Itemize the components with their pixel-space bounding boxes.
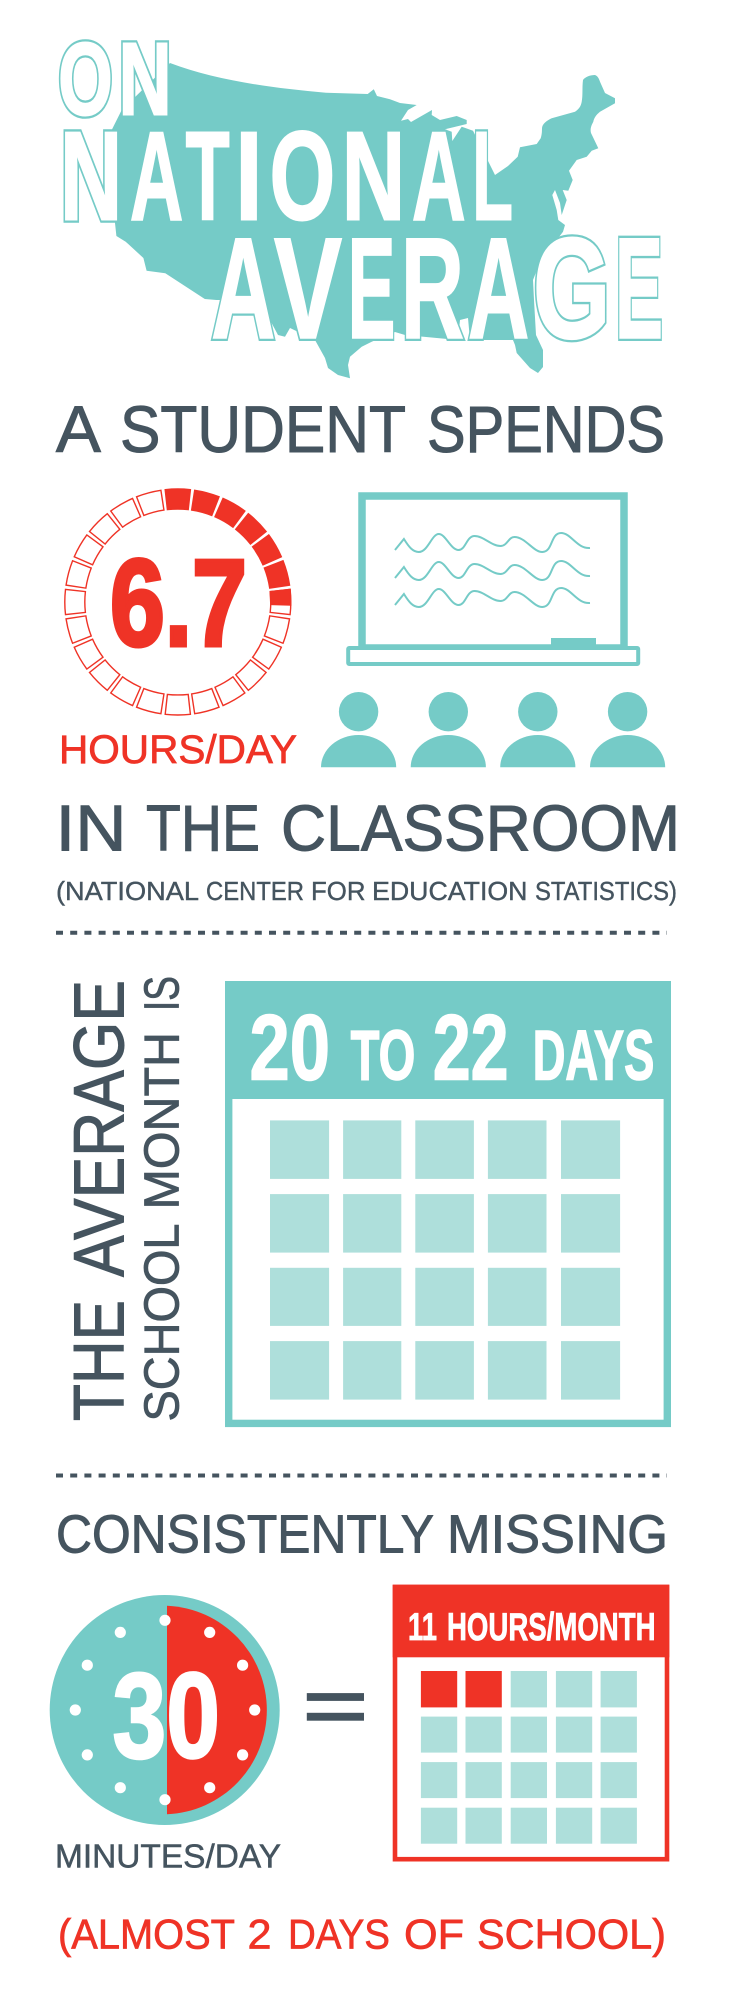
attended days cells: [421, 1671, 637, 1844]
icon: clock showing 30 minutes: [50, 1595, 280, 1825]
title: On National Average: E: [348, 209, 395, 369]
title outline layer: L: [472, 104, 513, 246]
title outline layer: I: [235, 104, 263, 246]
heading: A student spends: [56, 392, 665, 466]
missed days cells: [421, 1671, 502, 1707]
title outline layer: G: [533, 209, 610, 369]
closing note: almost 2 days of school: 2: [248, 1910, 272, 1957]
title outline layer: A: [130, 104, 183, 246]
title outline layer: V: [274, 209, 342, 369]
heading: A student spends: STUDENT: [120, 392, 406, 466]
heading: in the classroom: CLASSROOM: [281, 792, 680, 864]
title: On National Average: I: [235, 104, 263, 246]
title outline layer: A: [211, 209, 275, 369]
calendar: 11 hours per month: [393, 1585, 669, 1859]
heading: in the classroom: IN: [56, 792, 126, 864]
header text: [250, 996, 654, 1100]
calendar header band: [225, 981, 671, 1099]
title: On National Average: E: [615, 209, 663, 369]
clock tick dots: [70, 1615, 260, 1805]
title outline layer: N: [342, 104, 405, 246]
heading: consistently missing: MISSING: [447, 1505, 668, 1564]
rotated heading: the average: AVERAGE: [60, 980, 139, 1277]
closing note: almost 2 days of school: SCHOOL): [477, 1910, 666, 1957]
closing note: almost 2 days of school: [58, 1910, 666, 1957]
title: On National Average: A: [412, 104, 466, 246]
title outline layer: O: [58, 21, 113, 136]
heading: in the classroom: THE: [146, 792, 260, 864]
title outline layer: [58, 21, 663, 369]
closing note: almost 2 days of school: (ALMOST: [58, 1910, 235, 1957]
title: On National Average: A: [130, 104, 183, 246]
heading: A student spends: A: [56, 392, 101, 466]
title outline layer: E: [615, 209, 663, 369]
title: On National Average: N: [119, 21, 172, 136]
title outline layer: N: [119, 21, 172, 136]
header text: [408, 1606, 656, 1649]
icon: scribbled lines: [395, 533, 590, 607]
source note: CENTER: [206, 876, 304, 906]
heading: in the classroom: [56, 792, 680, 864]
icon: four students: [321, 692, 665, 767]
title outline layer: T: [186, 104, 230, 246]
header text: 20: [250, 996, 330, 1100]
header text: 11: [408, 1606, 437, 1649]
heading: A student spends: SPENDS: [427, 392, 665, 466]
rotated heading: school month is: [134, 976, 189, 1422]
rotated heading: school month is: IS: [134, 976, 189, 1011]
title: On National Average: A: [211, 209, 275, 369]
source note: EDUCATION: [372, 876, 528, 906]
title: On National Average: L: [472, 104, 513, 246]
calendar day cells: [270, 1120, 620, 1400]
title: On National Average: R: [401, 209, 464, 369]
title outline layer: R: [401, 209, 464, 369]
title outline layer: A: [412, 104, 466, 246]
title: On National Average: [58, 21, 663, 369]
rotated heading: school month is: MONTH: [134, 1032, 189, 1210]
header text: 22: [433, 996, 509, 1100]
header text: TO: [351, 1016, 415, 1094]
label: minutes per day: MINUTES/DAY: [55, 1837, 281, 1874]
number: 6.7: 6.7: [110, 536, 247, 672]
source note: STATISTICS): [535, 876, 677, 906]
title outline layer: N: [60, 104, 122, 246]
chart: 24-hour ring gauge: [65, 489, 291, 715]
header text: DAYS: [533, 1016, 654, 1094]
closing note: almost 2 days of school: DAYS: [288, 1910, 390, 1957]
title: On National Average: N: [60, 104, 122, 246]
icon: US map: [112, 63, 615, 378]
title outline layer: O: [270, 104, 335, 246]
rotated heading: school month is: SCHOOL: [134, 1224, 189, 1422]
title: On National Average: G: [533, 209, 610, 369]
title: On National Average: A: [468, 209, 529, 369]
source note: [56, 876, 677, 906]
label: hours per day: HOURS/DAY: [59, 728, 297, 772]
rotated heading: the average: [60, 980, 139, 1421]
title: On National Average: O: [270, 104, 335, 246]
source note: (NATIONAL: [56, 876, 199, 906]
number: 30: 30: [112, 1648, 220, 1784]
heading: consistently missing: CONSISTENTLY: [56, 1505, 434, 1564]
closing note: almost 2 days of school: OF: [404, 1910, 464, 1957]
title: On National Average: T: [186, 104, 230, 246]
title: On National Average: N: [342, 104, 405, 246]
calendar: 20 to 22 days: [225, 981, 671, 1423]
title: On National Average: O: [58, 21, 113, 136]
source note: FOR: [311, 876, 366, 906]
icon: whiteboard: [348, 496, 638, 664]
title outline layer: E: [348, 209, 395, 369]
rotated heading: the average: THE: [60, 1300, 139, 1421]
equals sign: [307, 1693, 364, 1721]
title: On National Average: V: [274, 209, 342, 369]
title outline layer: A: [468, 209, 529, 369]
calendar header band: [393, 1585, 669, 1657]
heading: consistently missing: [56, 1505, 668, 1564]
